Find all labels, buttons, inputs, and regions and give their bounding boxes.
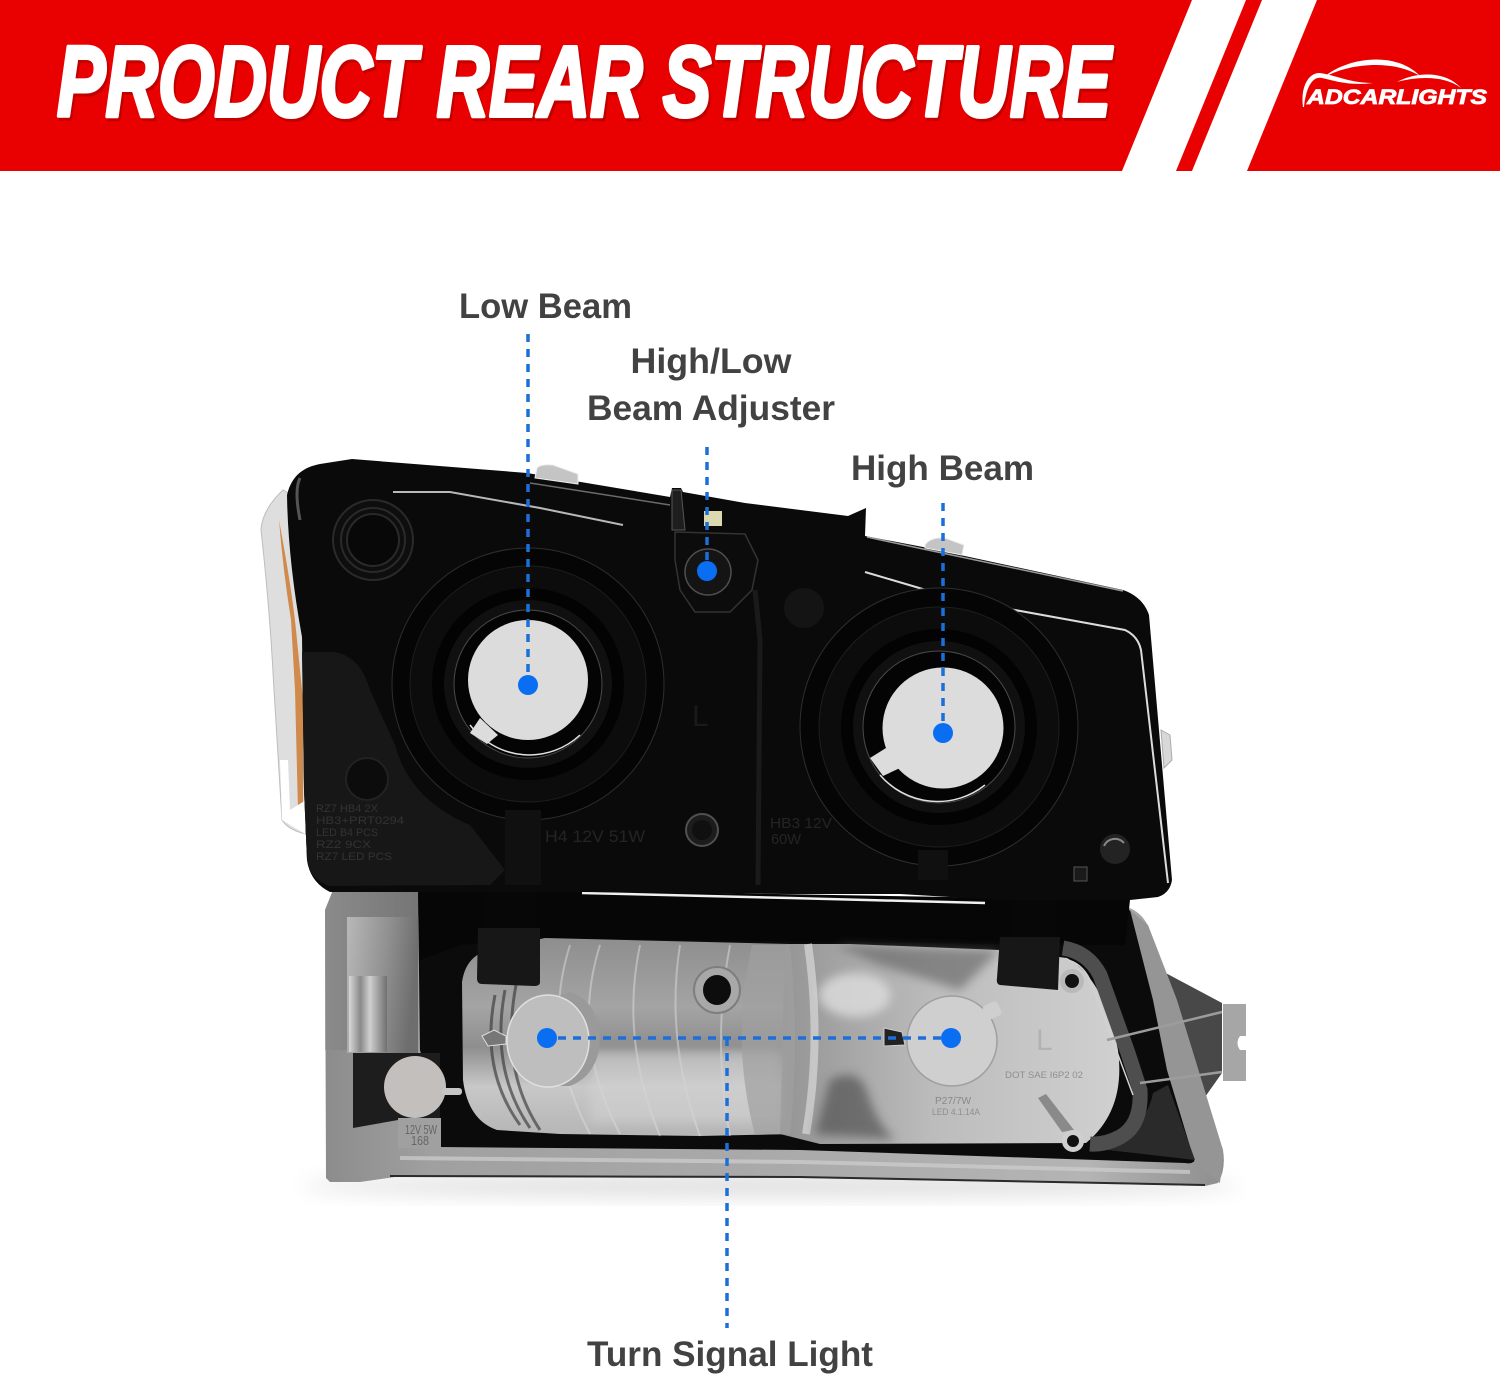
- leader line: horizontal: [558, 1036, 945, 1040]
- right side clip: [1161, 730, 1172, 768]
- top clip left: [535, 465, 578, 484]
- leader line: Low Beam: [526, 334, 530, 680]
- left bulb clip wire: [482, 1030, 506, 1046]
- label: High/Low Beam Adjuster: Beam Adjuster: [587, 389, 835, 428]
- right turn bulb cap: [907, 996, 1003, 1086]
- reflector rating text: DOT SAE I6P2 02: [1005, 1070, 1083, 1080]
- turn signal housing: LED 4.1.14A: [932, 1107, 980, 1117]
- turn signal housing: 168: [411, 1133, 429, 1148]
- right bulb clip wire: [884, 1028, 905, 1046]
- black top strip: [418, 888, 1130, 960]
- black interior: [418, 893, 1197, 1163]
- turn signal housing: [325, 885, 1246, 1186]
- header banner: [0, 0, 1500, 171]
- label: High/Low Beam Adjuster: High/Low: [630, 342, 792, 381]
- high beam socket: [800, 588, 1078, 866]
- top highlight line right: [865, 572, 1168, 883]
- title: PRODUCT REAR STRUCTURE: [57, 26, 1113, 138]
- bulb specification list: RZ7 HB4 2X: [316, 803, 379, 815]
- marker: adjuster: [697, 561, 717, 581]
- metal bracket back plate: [1160, 970, 1222, 1097]
- smudged reflection dark lower: [815, 1075, 895, 1140]
- screw post upper: [1060, 969, 1084, 993]
- label: Low Beam: Low Beam: [459, 287, 632, 326]
- label: Turn Signal Light: Turn Signal Light: [587, 1335, 873, 1374]
- right frame arm: [1130, 910, 1223, 1183]
- top edge highlight right: [867, 537, 1123, 591]
- callout: Turn Signal Light: [537, 1028, 961, 1374]
- marker: High Beam: [933, 723, 953, 743]
- red logo panel: [1247, 0, 1500, 171]
- left dark ribs: [491, 985, 540, 1130]
- lobe divider right: [806, 944, 815, 1134]
- metal clip tab: [1223, 1004, 1246, 1081]
- top highlight line left: [393, 492, 623, 525]
- marker: Low Beam: [518, 675, 538, 695]
- gasket: [1063, 948, 1140, 1144]
- top left grommet: [333, 500, 413, 580]
- red title band: [0, 0, 1192, 171]
- embossed circle: [784, 588, 824, 628]
- side marker bulb text: 12V 5W: [405, 1122, 438, 1137]
- low beam bulb cap: [468, 620, 588, 744]
- left turn bulb cap: [507, 992, 600, 1087]
- mount stud high: [1100, 834, 1130, 864]
- reflector: left lobe: [462, 938, 800, 1136]
- silver frame: [325, 890, 1224, 1186]
- smudged reflection upper: [819, 973, 891, 1017]
- leader line: vertical: [725, 1038, 729, 1328]
- white reflection on top strip: [582, 893, 985, 903]
- ground shadow: [300, 1176, 1240, 1196]
- lower-left dark dimple: [346, 758, 388, 800]
- leader line: adjuster: [705, 447, 709, 566]
- left hinge clip: [477, 885, 540, 986]
- logo: AdCarLights: [1302, 60, 1487, 109]
- reflector hole: [694, 967, 740, 1013]
- side marker bulb cap: [384, 1056, 462, 1118]
- low beam bulb rating: H4 12V 51W: [545, 827, 645, 846]
- callout: High/Low Beam Adjuster: [587, 342, 835, 581]
- frame top shading: [325, 890, 480, 1050]
- bulb specification list: LED B4 PCS: [316, 827, 378, 839]
- socket key high beam: [918, 850, 948, 880]
- marker: right turn bulb: [941, 1028, 961, 1048]
- small square mark: [1074, 867, 1087, 881]
- black pocket: [353, 1053, 440, 1128]
- marker: left turn bulb: [537, 1028, 557, 1048]
- reflector: right section: [780, 944, 1119, 1144]
- bulb specification list: RZ7 LED PCS: [316, 851, 392, 863]
- main headlamp unit: 60W: [771, 831, 802, 848]
- bulb specification list: [316, 803, 404, 863]
- logo: AdCarLights: ADCARLIGHTS: [1306, 86, 1487, 109]
- adjuster: [672, 490, 758, 612]
- lamp L mark: L: [692, 700, 709, 733]
- smudged reflection dark top: [835, 945, 1000, 990]
- lamp body silhouette: [287, 459, 1172, 900]
- top clip right: [925, 538, 964, 555]
- wire clips: [1107, 1012, 1222, 1083]
- lamp body centre ridge: [755, 590, 760, 885]
- socket key low beam: [505, 810, 541, 885]
- corner highlight: [297, 478, 300, 520]
- left silver panel: [347, 917, 418, 1053]
- frame highlight: [400, 1158, 1190, 1172]
- right hinge clip: [997, 893, 1060, 990]
- right bulb text: P27/7W: [935, 1096, 972, 1107]
- low beam socket: [392, 548, 664, 820]
- red diagonal stripe: [1176, 0, 1262, 171]
- title shadow: PRODUCT REAR STRUCTURE: [59, 29, 1115, 141]
- arm inner corner: [1090, 1085, 1195, 1160]
- bulb specification list: HB3+PRT0294: [316, 815, 404, 827]
- mount stud low: [686, 814, 718, 846]
- reflector L mark: L: [1036, 1024, 1053, 1057]
- label: High Beam: High Beam: [851, 449, 1034, 488]
- side marker socket plate: [398, 1118, 441, 1148]
- callout: High Beam: [851, 449, 1034, 743]
- lower-left shaded panel: [302, 652, 505, 886]
- lobe divider left: [742, 945, 795, 1135]
- leader line: High Beam: [941, 503, 945, 728]
- high beam bulb cap: [870, 668, 1004, 788]
- amber side lens: [261, 490, 312, 834]
- callout: Low Beam: [459, 287, 632, 695]
- bulb specification list: RZ2 9CX: [316, 839, 372, 851]
- main headlamp unit: [261, 459, 1172, 900]
- left bulb clip: [349, 976, 387, 1052]
- screw post lower: [1038, 1094, 1084, 1152]
- highlight band on left lobe: [590, 1052, 780, 1122]
- gasket inner edge: [1068, 960, 1133, 1095]
- high beam bulb rating: HB3 12V: [770, 815, 832, 832]
- frame bottom edge shadow: [390, 1176, 1205, 1185]
- top ridge left: [530, 483, 670, 505]
- reflector ribs: [559, 945, 730, 1136]
